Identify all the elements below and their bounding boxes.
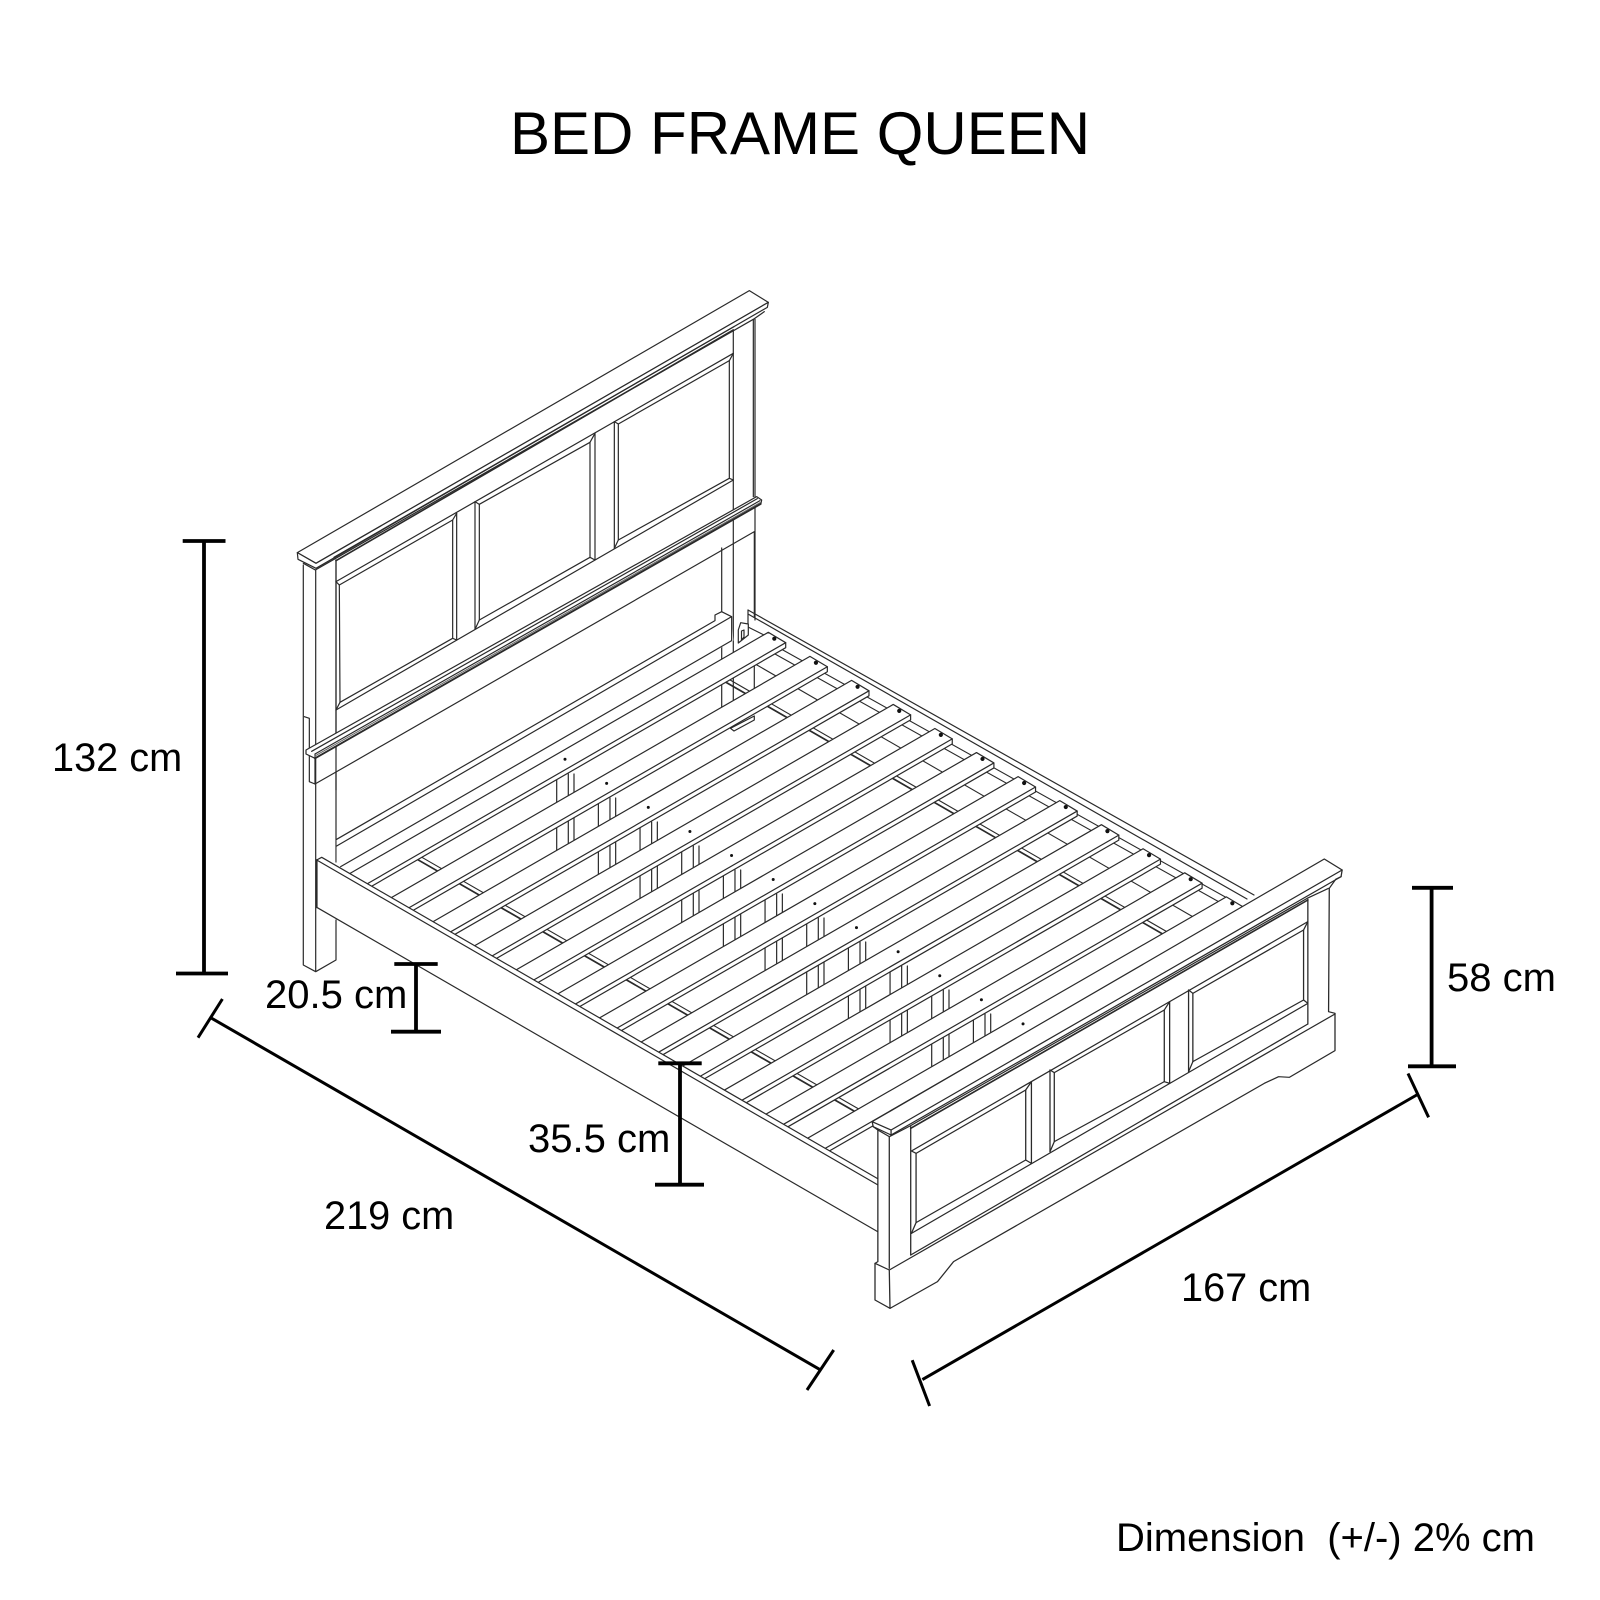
- panel: left: [336, 513, 457, 710]
- footboard panel rails and stiles: [911, 922, 1308, 1233]
- footboard posts: [889, 899, 1308, 1268]
- bracket: [738, 623, 748, 643]
- cross line: [750, 661, 1195, 918]
- tolerance note: Dimension (+/-) 2% cm: [1116, 1516, 1535, 1560]
- ledge along back rail: [775, 650, 1228, 903]
- footboard outline: [872, 859, 1342, 1308]
- dimension: clearance 35.5 cm: 35.5 cm: [528, 1117, 670, 1161]
- slats: [336, 632, 1244, 1163]
- ledge along front rail: [405, 852, 880, 1126]
- dimension: width 167 cm: 167 cm: [1181, 1266, 1311, 1310]
- dimension: rail height 20.5 cm: 20.5 cm: [265, 973, 407, 1017]
- dimension: height 132 cm: 132 cm: [52, 736, 182, 780]
- panel: right: [614, 353, 733, 548]
- top cap: [297, 291, 768, 570]
- bed frame illustration: [297, 291, 1342, 1308]
- dimension: height 132 cm: [52, 541, 228, 974]
- centre legs: [557, 774, 1032, 1118]
- dimension: rail height 20.5 cm: [265, 964, 441, 1032]
- footboard panel left: [911, 1082, 1031, 1233]
- dimension: length 219 cm: [198, 999, 834, 1390]
- side rail: [317, 857, 880, 1233]
- footboard cap: [872, 870, 1342, 1137]
- footboard panel right: [1189, 922, 1308, 1072]
- head cross rail: [337, 612, 733, 867]
- dimension: width 167 cm: [912, 1074, 1429, 1406]
- panel: centre: [475, 433, 595, 629]
- footboard: [872, 859, 1342, 1308]
- lower moulding and board: [304, 497, 762, 784]
- left post: [303, 560, 336, 972]
- title: BED FRAME QUEEN: [510, 100, 1090, 167]
- back rail: [748, 610, 1254, 899]
- panel rails and stiles: [336, 353, 733, 710]
- under-slat structure: [405, 610, 1254, 1126]
- footboard plinth: [875, 1014, 1335, 1308]
- small plate: [730, 716, 754, 731]
- right post and legs: [722, 319, 755, 708]
- dimension: footboard 58 cm: [1408, 888, 1556, 1066]
- dimension: clearance 35.5 cm: [528, 1063, 704, 1185]
- dimension: length 219 cm: 219 cm: [324, 1194, 454, 1238]
- dimension: footboard 58 cm: 58 cm: [1447, 956, 1556, 1000]
- centre beam: [715, 676, 1180, 944]
- footboard panel centre: [1050, 1002, 1170, 1152]
- left stile line: [334, 560, 338, 790]
- headboard: [297, 291, 768, 972]
